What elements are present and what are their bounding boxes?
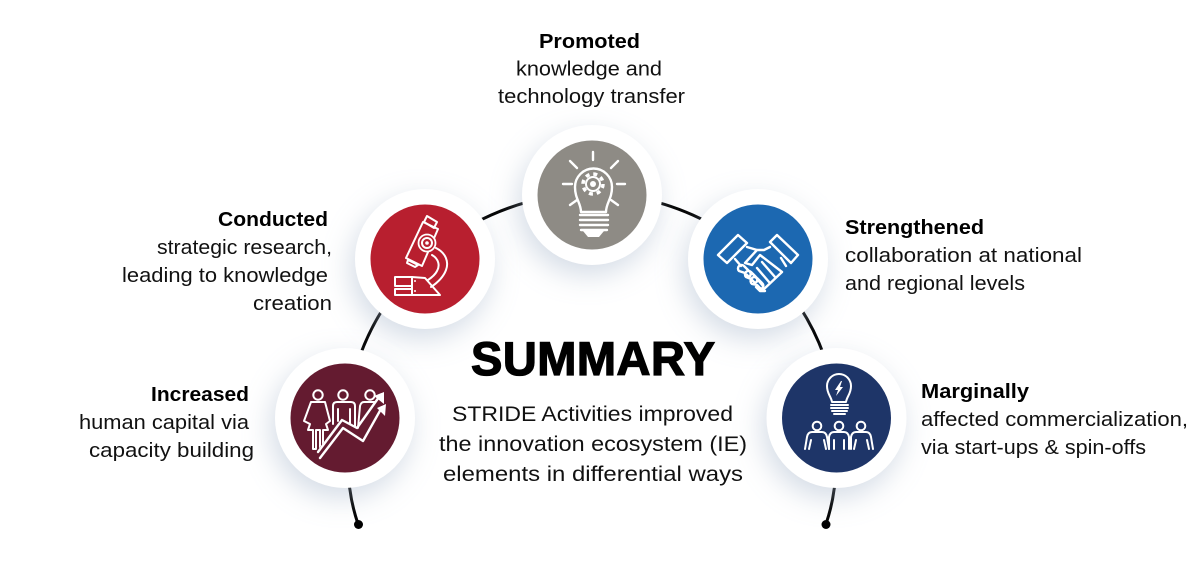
summary text [439, 402, 747, 486]
connecting arc [345, 194, 839, 529]
heading: increased [79, 383, 254, 462]
icon: microscope [355, 189, 495, 329]
heading: marginally: via start-ups & spin-offs [921, 436, 1146, 459]
heading: conducted: creation [253, 292, 332, 315]
summary text: STRIDE Activities improved [452, 402, 733, 426]
heading: marginally [921, 380, 1188, 459]
heading: promoted: technology transfer [498, 85, 685, 108]
title: SUMMARY [471, 332, 715, 385]
heading: increased: Increased [151, 383, 249, 406]
icon: handshake [688, 189, 828, 329]
heading: conducted: strategic research, [157, 236, 332, 259]
heading: strengthened: collaboration at national [845, 244, 1082, 267]
heading: strengthened: and regional levels [845, 272, 1025, 295]
heading: strengthened [845, 216, 1082, 295]
heading: increased: human capital via [79, 411, 250, 434]
icon: people with rising arrow [275, 348, 415, 488]
heading: promoted: knowledge and [516, 58, 662, 80]
heading: conducted [122, 208, 332, 315]
heading: conducted: Conducted [218, 208, 328, 231]
heading: strengthened: Strengthened [845, 216, 984, 239]
heading: promoted [498, 30, 685, 108]
heading: increased: capacity building [89, 439, 254, 462]
summary text: the innovation ecosystem (IE) [439, 432, 747, 456]
heading: marginally: affected commercialization, [921, 408, 1188, 431]
heading: marginally: Marginally [921, 380, 1030, 403]
summary text: elements in differential ways [443, 462, 743, 486]
heading: conducted: leading to knowledge [122, 264, 328, 287]
icon: bulb above team [766, 348, 906, 488]
heading: promoted: Promoted [539, 30, 640, 53]
icon: light bulb with gear [522, 125, 662, 265]
